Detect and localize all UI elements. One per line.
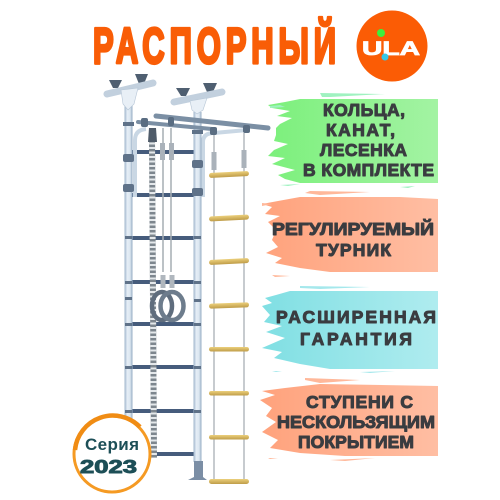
ceiling brackets: [107, 74, 222, 114]
panel: extended warranty: [262, 286, 438, 373]
text: steps lines: ПОКРЫТИЕМ: [298, 432, 414, 452]
title: РАСПОРНЫЙ: [93, 16, 336, 74]
rope: [148, 128, 157, 458]
text: kit lines: [303, 100, 434, 180]
rope ladder: [209, 133, 249, 484]
base plate: [188, 461, 207, 480]
text: bar lines: ТУРНИК: [316, 240, 391, 260]
text: bar lines: РЕГУЛИРУЕМЫЙ: [272, 218, 434, 239]
panel: adjustable bar: [262, 191, 438, 277]
text: bar lines: [272, 218, 434, 260]
text: kit lines: КАНАТ,: [326, 120, 395, 140]
white frame tubes: [135, 129, 247, 197]
text: steps lines: [277, 392, 435, 452]
badge: series 2023: [74, 416, 150, 492]
right pole: [194, 112, 202, 462]
text: kit lines: КОЛЬЦА,: [323, 100, 405, 120]
text: warranty lines: РАСШИРЕННАЯ: [276, 307, 436, 327]
icon: ULA logo: [356, 10, 428, 82]
clamps: [123, 122, 203, 413]
text: steps lines: НЕСКОЛЬЗЯЩИМ: [277, 412, 435, 432]
gymnastic rings: [152, 128, 184, 320]
text: kit lines: ЛЕСЕНКА: [320, 140, 407, 160]
panel: kit included: [268, 93, 438, 188]
pull-up bar: [138, 116, 268, 135]
rungs: [132, 152, 197, 454]
left pole: [124, 105, 132, 430]
text: kit lines: В КОМПЛЕКТЕ: [303, 160, 434, 180]
panel: anti-slip steps: [260, 378, 438, 461]
text: warranty lines: ГАРАНТИЯ: [300, 329, 412, 349]
badge: series 2023: Серия: [85, 435, 139, 454]
wall bars: [123, 105, 247, 480]
badge: series 2023: 2023: [80, 457, 137, 477]
text: warranty lines: [276, 307, 436, 349]
text: steps lines: СТУПЕНИ С: [306, 392, 413, 412]
icon: ULA logo: ULA: [362, 39, 420, 60]
